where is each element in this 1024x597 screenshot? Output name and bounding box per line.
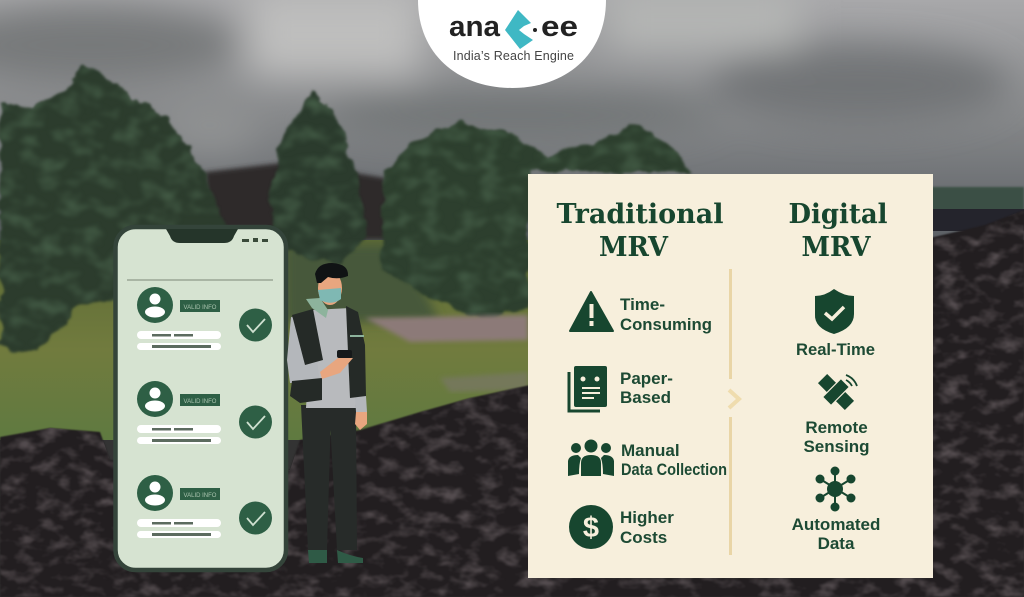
phone row 2: VALID INFO	[184, 399, 217, 405]
item: Real-Time: Real-Time	[796, 340, 875, 359]
item: Manual Data Collection: Data Collection	[621, 460, 727, 479]
background: stormy sky	[0, 0, 1024, 240]
handheld device	[337, 350, 352, 358]
item: Remote Sensing: Remote	[805, 418, 868, 437]
gray tee	[306, 308, 356, 408]
item: Higher Costs	[569, 505, 674, 549]
phone	[116, 227, 286, 570]
comparison panel	[528, 174, 933, 578]
item: Manual Data Collection	[568, 440, 727, 479]
icon: shield check	[815, 289, 854, 334]
heading: Digital MRV	[788, 199, 888, 263]
item: Higher Costs: Costs	[620, 528, 667, 547]
heading: Digital MRV: MRV	[802, 232, 872, 263]
background: forest and hills	[0, 66, 1024, 440]
vest lower left	[290, 378, 322, 403]
logo wordmark: ana	[449, 11, 501, 43]
divider with chevron	[729, 269, 739, 555]
item: Remote Sensing: Sensing	[803, 437, 870, 456]
item: Remote Sensing	[803, 369, 870, 456]
icon: network node	[816, 466, 856, 512]
item: Automated Data: Automated	[792, 515, 880, 534]
forearm and hand	[320, 358, 353, 379]
item: Manual Data Collection: Manual	[621, 441, 680, 460]
vest right panel	[346, 306, 366, 398]
phone row 3	[137, 475, 272, 538]
phone row 3: VALID INFO	[184, 493, 217, 499]
item: Automated Data	[792, 466, 880, 553]
item: Paper-Based: Based	[620, 388, 671, 407]
icon: document	[569, 366, 607, 411]
item: Paper-Based	[569, 366, 673, 411]
item: Time-Consuming: Time-	[620, 295, 665, 314]
phone body	[116, 227, 286, 570]
heading: Traditional MRV	[556, 199, 724, 263]
vest left panel	[292, 309, 323, 365]
right sleeve	[355, 396, 367, 412]
item: Automated Data: Data	[818, 534, 855, 553]
background: dark volcanic rock	[0, 210, 1024, 597]
heading: Traditional MRV: Traditional	[556, 199, 724, 230]
face mask	[318, 288, 341, 303]
logo tagline: India’s Reach Engine	[453, 49, 574, 63]
icon: warning triangle	[570, 292, 613, 331]
heading: Traditional MRV: MRV	[599, 232, 669, 263]
icon: people	[568, 440, 614, 476]
legs	[301, 405, 357, 550]
lower hand	[355, 412, 367, 430]
item: Paper-Based: Paper-	[620, 369, 673, 388]
phone row 1: VALID INFO	[184, 305, 217, 311]
item: Time-Consuming: Consuming	[620, 315, 712, 334]
item: Time-Consuming	[570, 292, 712, 334]
icon: satellite	[813, 369, 859, 415]
phone notch	[166, 229, 238, 243]
logo mark	[505, 10, 533, 49]
item: Higher Costs: Higher	[620, 508, 674, 527]
item: Real-Time	[796, 289, 875, 359]
logo badge	[418, 0, 606, 88]
person with mask and phone	[287, 263, 367, 563]
heading: Digital MRV: Digital	[788, 199, 888, 230]
phone status icons	[242, 238, 268, 242]
phone row 2	[137, 381, 272, 444]
hair	[315, 263, 348, 283]
collar	[306, 298, 328, 318]
shoes	[308, 550, 363, 563]
logo badge: ee	[541, 11, 578, 43]
phone row 1	[137, 287, 272, 350]
icon: dollar coin: $	[583, 512, 599, 544]
left arm	[287, 317, 320, 383]
head	[318, 271, 342, 305]
